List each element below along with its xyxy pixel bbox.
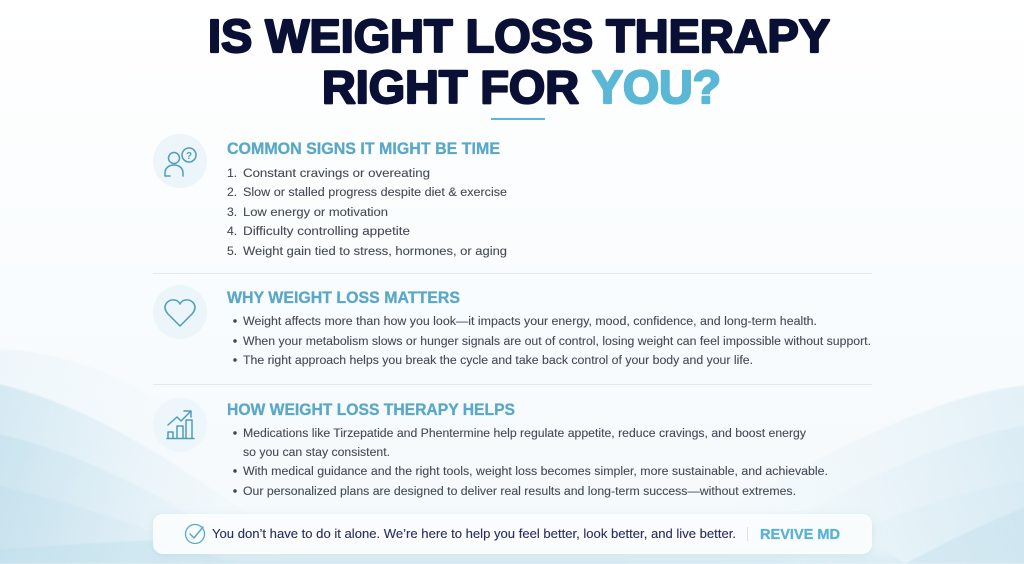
brand name: REVIVE MD <box>760 526 840 543</box>
bullet list <box>233 314 871 367</box>
callout text: You don’t have to do it alone. We’re here to help you feel better, look better, and live better. <box>212 526 736 541</box>
heading: COMMON SIGNS IT MIGHT BE TIME <box>227 140 500 158</box>
icon: person with question bubble: ? <box>186 151 192 162</box>
bullet list <box>233 426 828 498</box>
bullet list: Our personalized plans are designed to deliver real results and long-term success—without extremes. <box>243 484 796 498</box>
icon: check circle <box>186 524 204 544</box>
title: YOU? <box>592 61 721 113</box>
title: IS WEIGHT LOSS THERAPY <box>208 10 830 62</box>
numbered list: 5. <box>227 244 237 258</box>
bullet list: so you can stay consistent. <box>243 445 390 459</box>
numbered list: Slow or stalled progress despite diet & exercise <box>243 185 507 199</box>
numbered list <box>227 166 507 258</box>
numbered list: Difficulty controlling appetite <box>243 224 410 238</box>
title <box>208 10 830 113</box>
numbered list: 2. <box>227 185 237 199</box>
icon: person with question bubble <box>153 134 207 188</box>
numbered list: 1. <box>227 166 237 180</box>
bullet list: When your metabolism slows or hunger signals are out of control, losing weight can feel impossible without support. <box>243 334 871 348</box>
bullet list: The right approach helps you break the cycle and take back control of your body and your life. <box>243 353 753 367</box>
numbered list: 4. <box>227 224 237 238</box>
numbered list: Weight gain tied to stress, hormones, or aging <box>243 244 507 258</box>
numbered list: Low energy or motivation <box>243 205 388 219</box>
panel: common signs <box>153 134 507 258</box>
icon: rising bar chart <box>153 398 207 452</box>
title underline <box>491 118 545 120</box>
callout banner <box>153 514 872 554</box>
numbered list: 3. <box>227 205 237 219</box>
bullet list: Medications like Tirzepatide and Phentermine help regulate appetite, reduce cravings, and boost energy <box>243 426 807 440</box>
bullet list: With medical guidance and the right tools, weight loss becomes simpler, more sustainable, and achievable. <box>243 464 828 478</box>
bullet list: Weight affects more than how you look—it impacts your energy, mood, confidence, and long-term health. <box>243 314 817 328</box>
panel: why weight loss matters <box>153 285 871 367</box>
heading: WHY WEIGHT LOSS MATTERS <box>227 289 460 307</box>
title: RIGHT FOR <box>322 61 579 113</box>
panel: how therapy helps <box>153 398 828 498</box>
icon: heart <box>153 285 207 339</box>
heading: HOW WEIGHT LOSS THERAPY HELPS <box>227 401 515 419</box>
numbered list: Constant cravings or overeating <box>243 166 430 180</box>
